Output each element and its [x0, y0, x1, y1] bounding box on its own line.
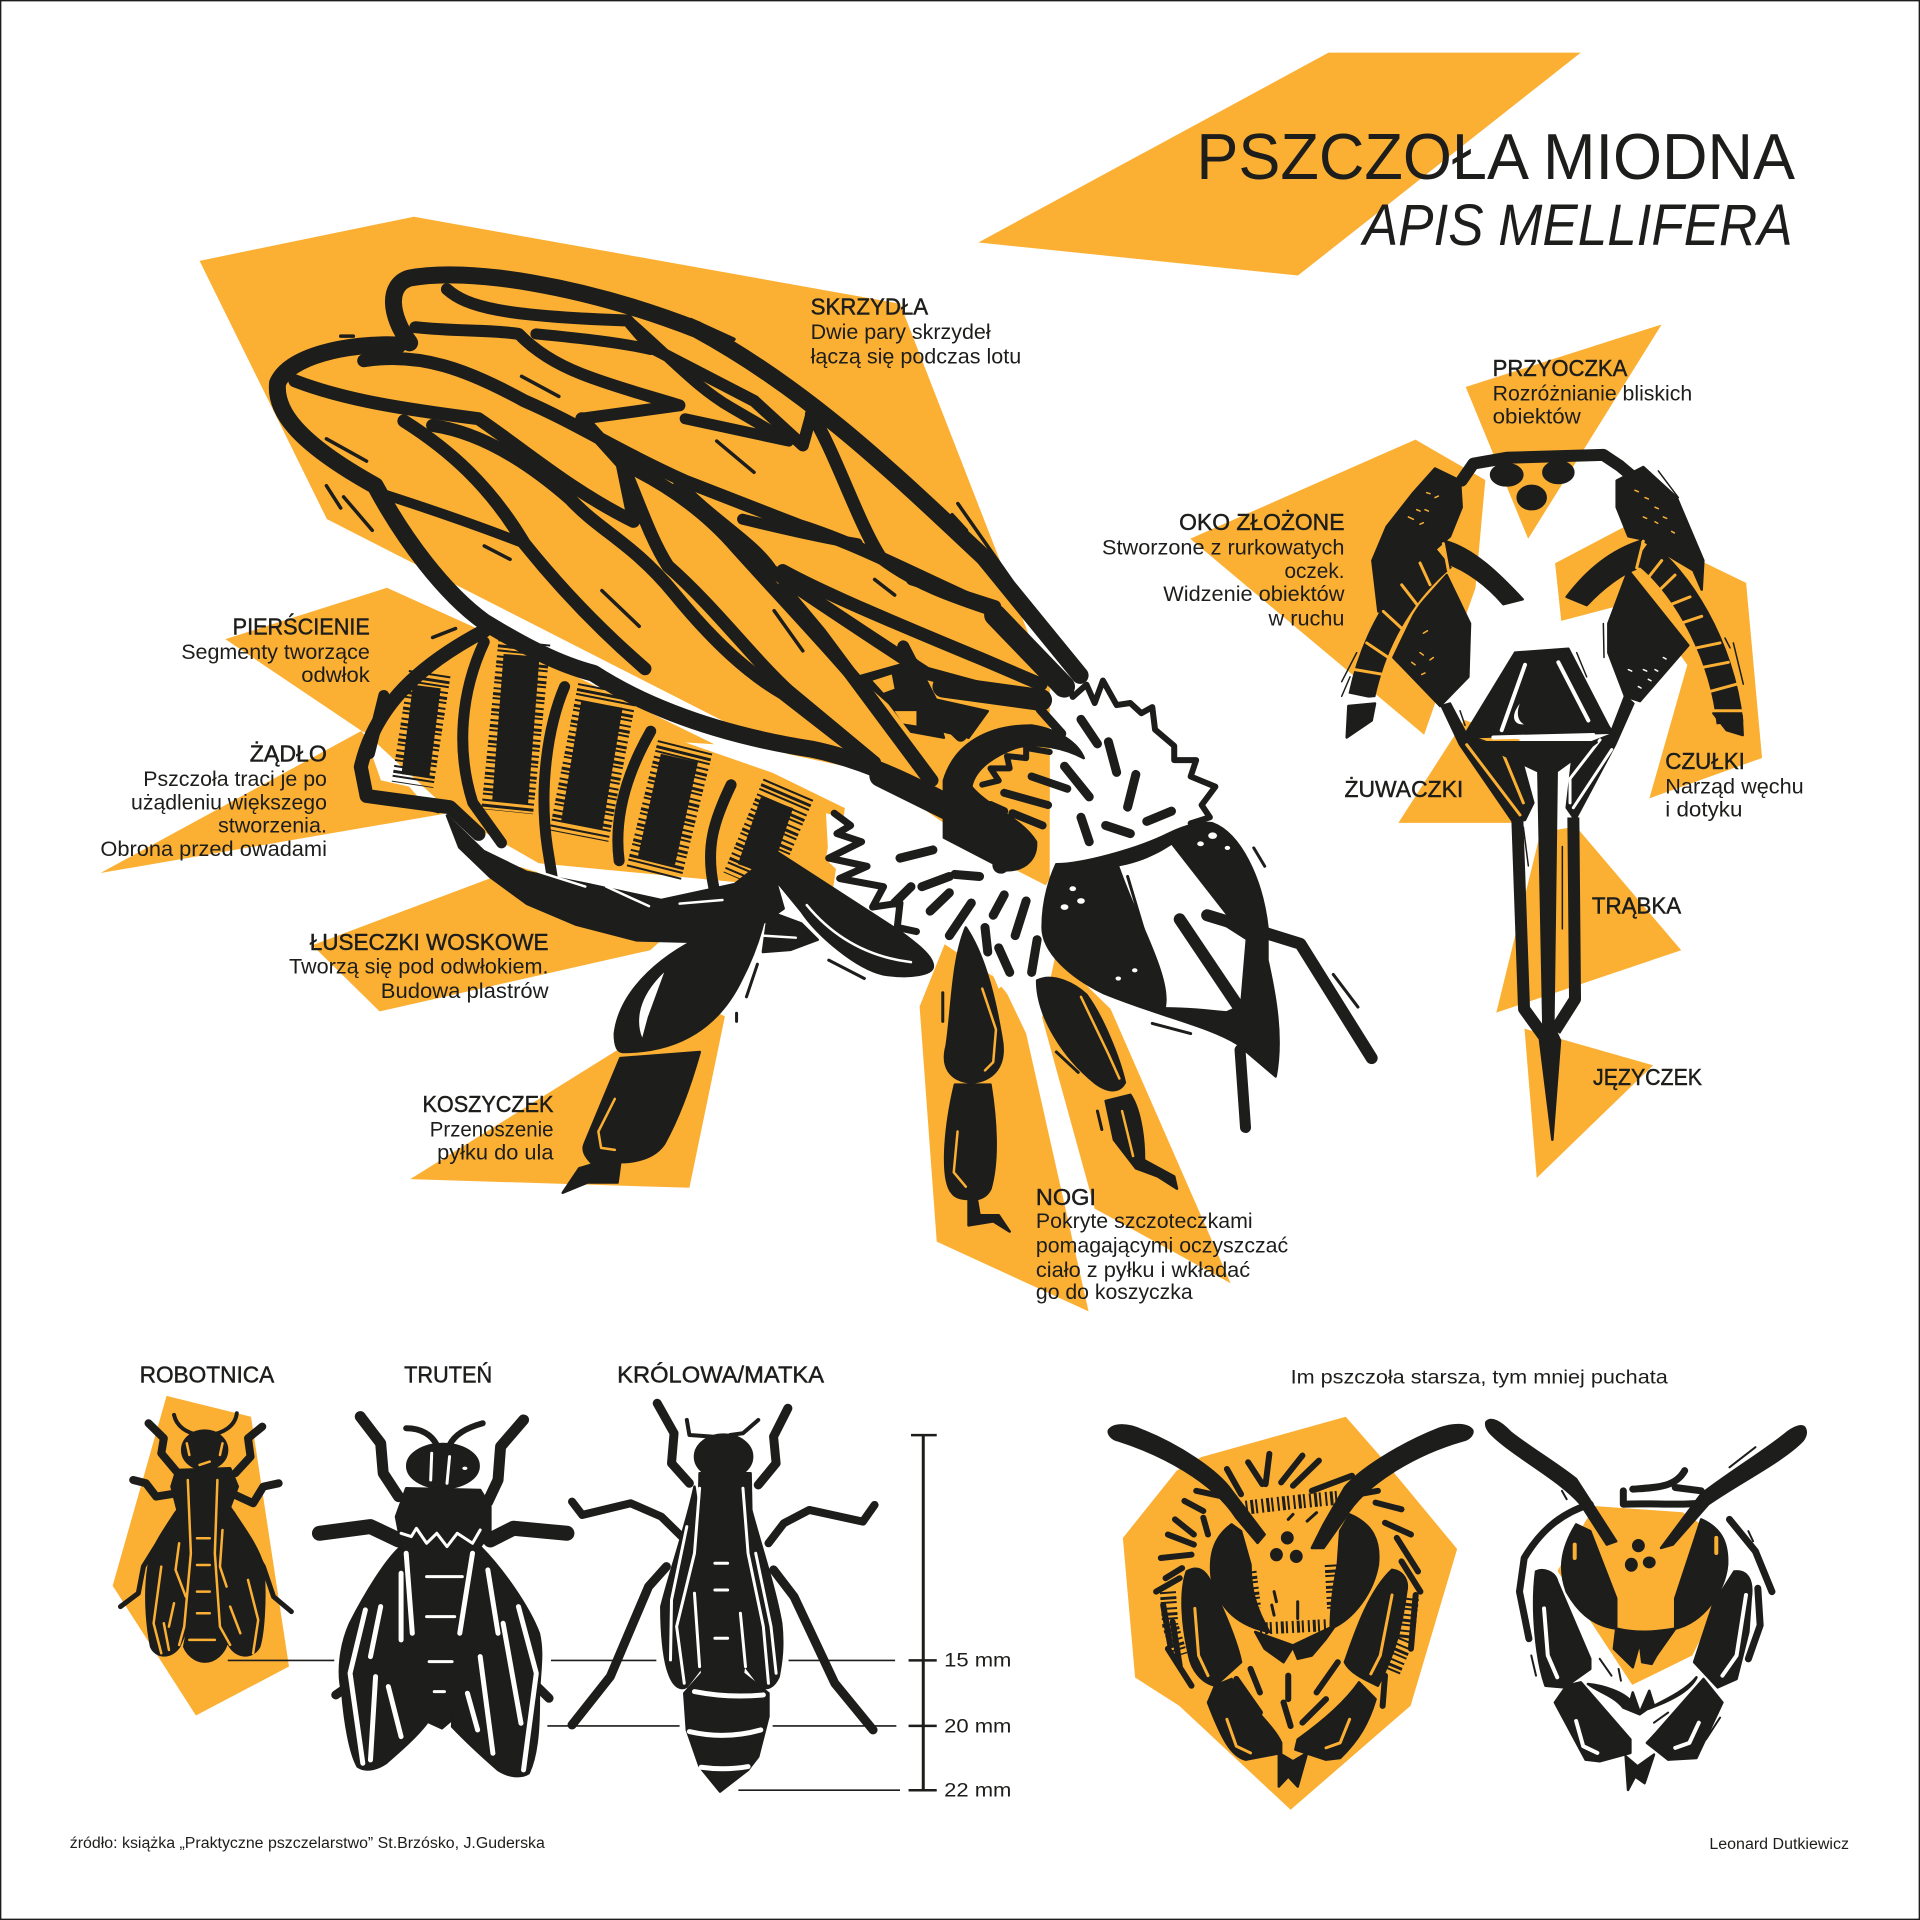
caste headings: TRUTEŃ — [404, 1361, 492, 1387]
scale labels: 20 mm — [944, 1716, 1011, 1738]
label: łuseczki woskowe — [289, 929, 550, 1003]
label: koszyczek — [422, 1091, 554, 1165]
label: łuseczki woskowe: Budowa plastrów — [381, 980, 550, 1003]
head side view — [1043, 823, 1372, 1127]
label: pierścienie: odwłok — [301, 664, 370, 687]
scale lines — [228, 1435, 937, 1790]
label: nogi: Pokryte szczoteczkami — [1036, 1210, 1253, 1233]
label: skrzydła: łączą się podczas lotu — [811, 346, 1021, 369]
orange background shapes — [100, 53, 1762, 1810]
label: przyoczka: obiektów — [1493, 406, 1582, 429]
wing hatch marks — [326, 309, 1012, 812]
label: pierścienie — [181, 613, 370, 687]
big bee illustration — [277, 275, 1372, 1232]
chest tuft — [1588, 1677, 1696, 1714]
fur strands — [1156, 1454, 1420, 1726]
label: nogi: pomagającymi oczyszczać — [1036, 1235, 1288, 1258]
wing veins — [364, 358, 1053, 673]
label: nogi: NOGI — [1036, 1184, 1096, 1210]
label: koszyczek: Przenoszenie — [430, 1118, 553, 1141]
head hair outline — [1519, 1471, 1772, 1659]
label: przyoczka: PRZYOCZKA — [1493, 355, 1628, 381]
upper wing outline — [393, 275, 1080, 675]
eyes and face — [1562, 1519, 1727, 1667]
proboscis — [1477, 742, 1597, 1140]
label: żądło — [100, 741, 327, 861]
antennae — [1486, 1420, 1806, 1548]
second leg — [943, 927, 1010, 1232]
caste headings — [140, 1361, 825, 1387]
head front diagram — [1342, 455, 1743, 1140]
title: PSZCZOŁA MIODNA — [1196, 120, 1796, 193]
middle leg — [763, 850, 933, 976]
label: nogi: go do koszyczka — [1036, 1281, 1193, 1304]
label: żądło: Pszczoła traci je po — [143, 768, 327, 791]
thorax white fur — [563, 660, 1372, 1232]
front leg — [1037, 978, 1177, 1189]
scale labels — [944, 1650, 1011, 1801]
eyes and face — [1211, 1514, 1378, 1662]
label: żądło: użądleniu większego — [131, 791, 327, 814]
clypeus — [1463, 649, 1612, 737]
abdomen — [361, 588, 1001, 887]
label: oko złożone: w ruchu — [1268, 608, 1344, 631]
label: nogi: ciało z pyłku i wkładać — [1036, 1259, 1250, 1282]
title — [1196, 120, 1796, 258]
label: przyoczka: Rozróżnianie bliskich — [1493, 382, 1692, 405]
head portrait: young fuzzy bee — [1109, 1425, 1472, 1787]
label: łuseczki woskowe: ŁUSECZKI WOSKOWE — [310, 929, 549, 955]
caste headings: ROBOTNICA — [140, 1361, 275, 1387]
ocelli — [1491, 462, 1573, 509]
label: języczek: JĘZYCZEK — [1593, 1064, 1702, 1090]
label: przyoczka — [1493, 355, 1692, 429]
label: pierścienie: Segmenty tworzące — [181, 641, 370, 664]
antennae — [1109, 1425, 1472, 1548]
label: żądło: ŻĄDŁO — [250, 741, 327, 767]
compound eyes — [1372, 467, 1703, 706]
lower wing outline — [277, 345, 1024, 865]
mandibles — [1442, 696, 1633, 822]
label: nogi — [1036, 1184, 1288, 1304]
label: czułki — [1665, 748, 1804, 822]
author credit: Leonard Dutkiewicz — [1709, 1836, 1849, 1853]
wings — [277, 275, 1080, 865]
queen bee — [572, 1403, 875, 1792]
label: skrzydła: SKRZYDŁA — [811, 294, 929, 320]
label: czułki: i dotyku — [1665, 799, 1742, 822]
source note: źródło: książka „Praktyczne pszczelarstwo” St.Brzósko, J.Guderska — [70, 1835, 545, 1852]
label: koszyczek: KOSZYCZEK — [422, 1091, 553, 1117]
label: żuwaczki: ŻUWACZKI — [1344, 776, 1463, 802]
worker bee — [120, 1413, 291, 1662]
abdomen underside plates — [447, 816, 784, 943]
drone bee — [319, 1417, 567, 1776]
label: oko złożone: OKO ZŁOŻONE — [1179, 509, 1344, 535]
shoulder lobe — [944, 725, 1084, 870]
title: APIS MELLIFERA — [1360, 193, 1793, 258]
label: oko złożone: oczek. — [1284, 560, 1344, 583]
hidden wing-base structure — [859, 660, 988, 738]
legs — [1183, 1569, 1407, 1787]
label: koszyczek: pyłku do ula — [437, 1142, 554, 1165]
hind leg — [563, 860, 771, 1193]
label: oko złożone — [1102, 509, 1346, 631]
caste headings: KRÓLOWA/MATKA — [617, 1361, 825, 1387]
label: oko złożone: Widzenie obiektów — [1163, 583, 1346, 606]
label: żądło: Obrona przed owadami — [100, 838, 327, 861]
antennae — [1342, 471, 1743, 737]
scale labels: 15 mm — [944, 1650, 1011, 1672]
fuzz caption: Im pszczoła starsza, tym mniej puchata — [1291, 1367, 1668, 1389]
label: oko złożone: Stworzone z rurkowatych — [1102, 537, 1344, 560]
label: żądło: stworzenia. — [218, 815, 327, 838]
label: trąbka: TRĄBKA — [1592, 892, 1682, 918]
label: skrzydła — [811, 294, 1021, 369]
label: czułki: Narząd węchu — [1665, 775, 1804, 798]
label: pierścienie: PIERŚCIENIE — [233, 613, 370, 639]
legs — [1534, 1570, 1751, 1790]
head portrait: old bald bee — [1486, 1420, 1806, 1790]
label: łuseczki woskowe: Tworzą się pod odwłokiem. — [289, 955, 549, 978]
label: czułki: CZUŁKI — [1665, 748, 1745, 774]
top bar of head — [1462, 455, 1633, 481]
scale labels: 22 mm — [944, 1779, 1011, 1801]
label: skrzydła: Dwie pary skrzydeł — [811, 321, 991, 344]
